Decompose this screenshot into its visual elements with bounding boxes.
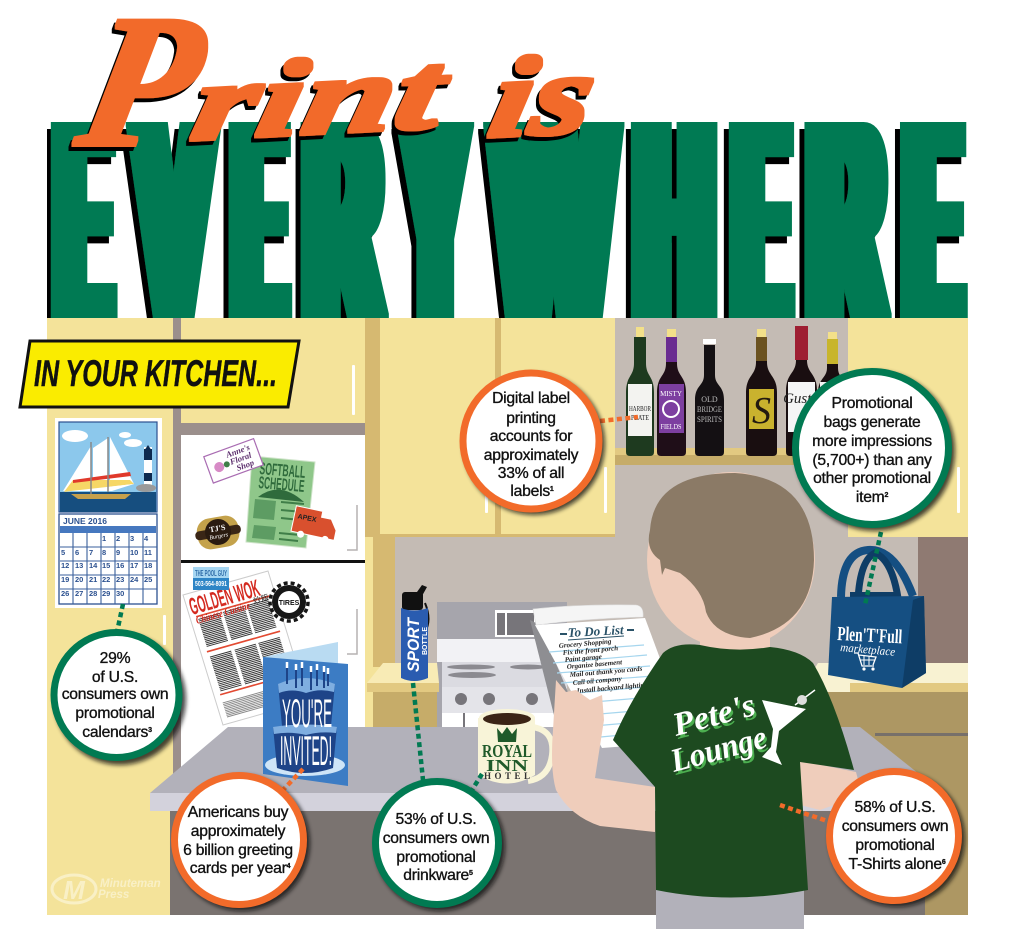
callout: t-shirts statistic: 6 xyxy=(942,859,946,866)
callout banner: In your kitchen: IN YOUR KITCHEN... xyxy=(34,353,277,394)
icon: wine bottles with labels: OLD xyxy=(701,395,718,404)
icon: promotional calendar: 29 xyxy=(102,589,110,598)
icon: floral shop magnet: Anne's xyxy=(224,442,252,460)
icon: Apex truck magnet xyxy=(290,506,339,545)
icon: TJ's burger magnet: TJ'S xyxy=(209,523,227,534)
icon: sport water bottle: SPORT xyxy=(404,617,423,672)
callout: digital labels statistic: labels xyxy=(510,483,554,500)
icon: promotional calendar: 18 xyxy=(144,561,152,570)
title: EVERYWHERE: E xyxy=(908,65,958,376)
title: Print is xyxy=(64,0,606,187)
icon: Royal Inn coffee mug: ROYAL xyxy=(482,741,532,761)
callout: greeting cards statistic: Americans buy xyxy=(188,804,289,821)
callout: promotional bags statistic: 2 xyxy=(884,492,888,499)
icon: promotional calendar: 14 xyxy=(89,561,98,570)
icon: promotional calendar: 20 xyxy=(75,575,83,584)
icon: promotional calendar: 22 xyxy=(102,575,110,584)
icon: promotional calendar: 21 xyxy=(89,575,97,584)
icon: promotional calendar: 25 xyxy=(144,575,152,584)
icon: Golden Wok menu: GOLDEN WOK xyxy=(186,575,263,621)
icon: Royal Inn coffee mug: HOTEL xyxy=(484,771,530,781)
icon: to do list notepad xyxy=(530,605,668,748)
callout: promotional bags statistic: bags generate xyxy=(823,414,921,431)
icon: promotional calendar: 5 xyxy=(61,548,65,557)
callout: t-shirts statistic: consumers own xyxy=(842,818,948,835)
callout: promotional bags statistic: (5,700+) than any xyxy=(812,452,932,469)
icon: to do list notepad: Fix the front porch xyxy=(562,644,618,657)
title: EVERYWHERE: V xyxy=(138,64,209,375)
icon: Royal Inn coffee mug xyxy=(478,709,552,784)
icon: person from behind: Pete's xyxy=(670,690,761,747)
icon: promotional calendar: 26 xyxy=(61,589,69,598)
callout: greeting cards statistic: approximately xyxy=(191,823,286,840)
title: EVERYWHERE: R xyxy=(811,65,881,376)
icon: promotional calendar: 1 xyxy=(102,534,106,543)
callout: drinkware statistic: 5 xyxy=(469,870,473,877)
callout: digital labels statistic: accounts for xyxy=(490,428,572,445)
icon: Pool Guy magnet: 503-564-8091 xyxy=(195,581,227,588)
icon: Golden Wok menu: 炒飯 xyxy=(252,592,270,606)
icon: to do list notepad: To Do List xyxy=(567,622,624,640)
icon: Royal Inn coffee mug: INN xyxy=(486,756,529,775)
callout: calendars statistic: calendars xyxy=(82,724,152,741)
icon: wine bottles with labels: BRIDGE xyxy=(697,405,722,414)
icon: promotional calendar: 8 xyxy=(102,548,106,557)
title: EVERYWHERE: Y xyxy=(408,64,463,376)
icon: to do list notepad: Call oil company xyxy=(572,675,623,687)
callout: t-shirts statistic: 58% of U.S. xyxy=(855,799,935,816)
callout: greeting cards statistic: 4 xyxy=(287,863,291,870)
icon: promotional calendar: 19 xyxy=(61,575,69,584)
icon: Plen T Full shopping bag: Plen'T'Full xyxy=(837,623,903,648)
callout: promotional bags statistic: item xyxy=(856,489,888,506)
icon: promotional calendar: 27 xyxy=(75,589,83,598)
icon: floral shop magnet xyxy=(204,439,263,483)
icon: sport water bottle xyxy=(401,585,429,681)
icon: greeting card xyxy=(263,642,348,786)
callout: digital labels statistic: printing xyxy=(506,410,556,427)
icon: softball schedule flyer magnet: SOFTBALL xyxy=(259,459,306,482)
callout: drinkware statistic: 53% of U.S. xyxy=(396,811,476,828)
icon: wine bottles with labels xyxy=(626,326,846,456)
icon: promotional calendar: 12 xyxy=(61,561,69,570)
icon: sport water bottle: BOTTLE xyxy=(422,627,429,655)
callout: digital labels statistic: 1 xyxy=(550,486,554,493)
callout: digital labels statistic: 33% of all xyxy=(498,465,564,482)
icon: Pool Guy magnet xyxy=(193,567,229,590)
title: EVERYWHERE: H xyxy=(637,64,711,376)
icon: Golden Wok menu xyxy=(183,571,308,725)
callout: calendars statistic: 29% xyxy=(100,650,131,667)
icon: person from behind: Pete's xyxy=(668,687,759,744)
title: EVERYWHERE: E xyxy=(237,64,282,376)
icon: promotional calendar: 10 xyxy=(130,548,138,557)
callout: digital labels statistic xyxy=(463,373,605,515)
icon: Plen T Full shopping bag xyxy=(828,550,926,688)
callout: promotional bags statistic: more impressions xyxy=(812,433,932,450)
icon: wine bottles with labels: MISTY xyxy=(660,390,682,398)
callout banner: In your kitchen xyxy=(20,341,299,407)
icon: person from behind: Lounge xyxy=(666,720,771,780)
callout: t-shirts statistic: T-Shirts alone xyxy=(849,856,946,873)
title: EVERYWHERE: R xyxy=(307,65,378,376)
icon: softball schedule flyer magnet xyxy=(246,456,315,548)
callout: drinkware statistic: consumers own xyxy=(383,830,489,847)
icon: TJ's burger magnet xyxy=(193,513,243,552)
callout: drinkware statistic: promotional xyxy=(396,849,476,866)
icon: to do list notepad: Mail out thank you cards xyxy=(568,665,643,679)
text: YOU'RE xyxy=(282,692,332,736)
icon: promotional calendar: 17 xyxy=(130,561,138,570)
icon: Plen T Full shopping bag: marketplace xyxy=(840,640,896,659)
icon: TJ's burger magnet: Burgers xyxy=(209,532,229,542)
icon: promotional calendar: 28 xyxy=(89,589,97,598)
icon: wine bottles with labels: S xyxy=(752,390,771,432)
icon: promotional calendar: 6 xyxy=(75,548,79,557)
callout: promotional bags statistic xyxy=(795,371,955,531)
icon: promotional calendar: 23 xyxy=(116,575,124,584)
icon: promotional calendar xyxy=(55,418,162,608)
icon: Minuteman Press logo: Minuteman xyxy=(100,878,161,890)
icon: Pool Guy magnet: THE POOL GUY xyxy=(195,569,227,578)
icon: promotional calendar: 4 xyxy=(144,534,149,543)
icon: promotional calendar: 7 xyxy=(89,548,93,557)
icon: Minuteman Press logo xyxy=(52,875,161,905)
callout: calendars statistic: 3 xyxy=(148,727,152,734)
panel: refrigerator xyxy=(181,435,365,768)
icon: tire shop magnet: TIRES xyxy=(279,600,300,607)
panel: back counters and stove xyxy=(367,602,968,915)
icon: promotional calendar: 3 xyxy=(130,534,134,543)
callout: calendars statistic xyxy=(54,632,186,765)
callout: calendars statistic: consumers own xyxy=(62,686,168,703)
icon: to do list notepad: Grocery Shopping xyxy=(558,637,612,650)
icon: to do list notepad: Paint garage xyxy=(564,653,602,664)
callout: drinkware statistic xyxy=(375,781,505,911)
icon: wine bottles with labels: Gusto xyxy=(783,391,819,407)
panel: island counter xyxy=(150,727,968,915)
title: EVERYWHERE: E xyxy=(737,64,785,376)
title: EVERYWHERE: E xyxy=(59,64,107,376)
title: EVERYWHERE: W xyxy=(496,63,612,376)
callout: calendars statistic: promotional xyxy=(75,705,155,722)
callout: t-shirts statistic xyxy=(829,771,965,907)
title: EVERYWHERE xyxy=(47,122,968,318)
icon: promotional calendar: 30 xyxy=(116,589,124,598)
callout: promotional bags statistic: Promotional xyxy=(832,395,912,412)
icon: Minuteman Press logo: M xyxy=(63,875,86,905)
icon: promotional calendar: 11 xyxy=(144,548,152,557)
icon: person from behind: Lounge xyxy=(668,723,773,783)
icon: promotional calendar: 16 xyxy=(116,561,124,570)
icon: to do list notepad: Organize basement xyxy=(566,658,623,671)
icon: promotional calendar: 13 xyxy=(75,561,83,570)
callout: t-shirts statistic: promotional xyxy=(855,837,935,854)
title: Print is: is xyxy=(480,30,606,163)
title: Print is: rint xyxy=(183,30,459,165)
panel: kitchen scene xyxy=(47,318,968,915)
icon: to do list notepad: Install backyard lighting xyxy=(575,681,649,695)
icon: promotional calendar: 9 xyxy=(116,548,120,557)
icon: softball schedule flyer magnet: SCHEDULE xyxy=(258,473,305,496)
icon: person from behind xyxy=(552,472,862,929)
callout: promotional bags statistic: other promotional xyxy=(813,470,931,487)
icon: promotional calendar: 24 xyxy=(130,575,139,584)
icon: Golden Wok menu: Chinese Cuisine xyxy=(195,600,252,627)
arrow: dotted connectors xyxy=(117,417,881,822)
callout: digital labels statistic: Digital label xyxy=(492,390,570,407)
callout: digital labels statistic: approximately xyxy=(484,447,579,464)
callout: greeting cards statistic: 6 billion greeting xyxy=(183,842,293,859)
callout: greeting cards statistic: cards per year xyxy=(190,860,291,877)
icon: wine bottles with labels: SPIRITS xyxy=(697,415,722,424)
icon: promotional calendar: JUNE 2016 xyxy=(63,516,107,526)
icon: tire shop magnet xyxy=(270,583,308,621)
icon: floral shop magnet: Floral xyxy=(227,450,253,467)
icon: promotional calendar: 2 xyxy=(116,534,120,543)
icon: wine bottles with labels: HARBOR xyxy=(629,405,651,413)
icon: promotional calendar: 15 xyxy=(102,561,110,570)
text: INVITED! xyxy=(280,727,332,774)
icon: wine bottles with labels: PLATE xyxy=(631,414,649,422)
icon: wine bottles with labels: FIELDS xyxy=(660,423,682,431)
icon: Minuteman Press logo: Press xyxy=(98,889,129,901)
icon: Apex truck magnet: APEX xyxy=(297,513,317,524)
callout: greeting cards statistic xyxy=(174,775,310,911)
callout: calendars statistic: of U.S. xyxy=(92,669,138,686)
callout: drinkware statistic: drinkware xyxy=(403,867,473,884)
icon: floral shop magnet: Shop xyxy=(235,457,255,473)
